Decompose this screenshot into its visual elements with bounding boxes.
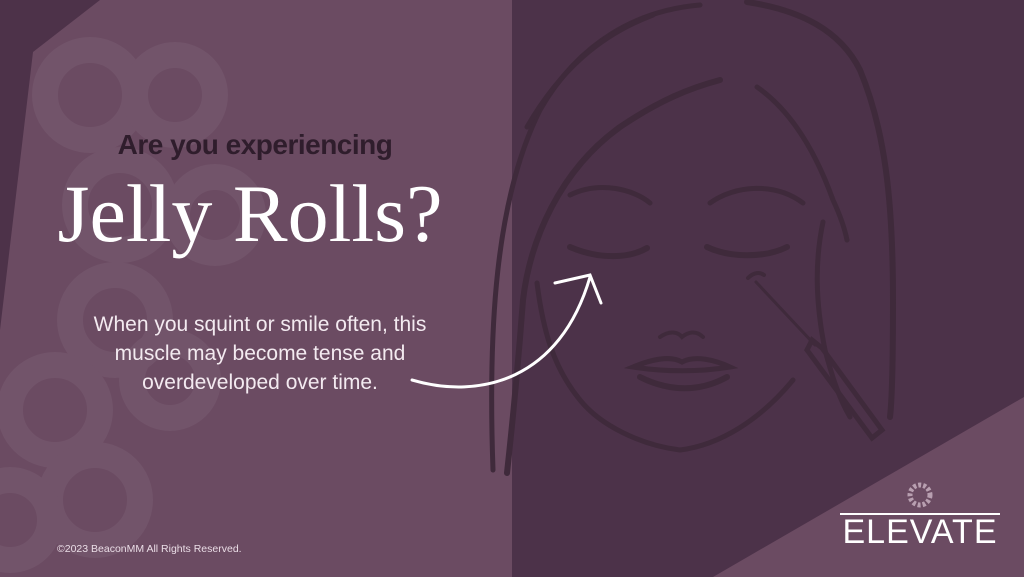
top-left dark corner <box>0 0 100 330</box>
icon: mandala <box>908 482 932 508</box>
nose <box>660 332 703 337</box>
lips <box>633 359 730 371</box>
decorative pattern <box>0 50 253 560</box>
text block: description: When you squint or smile often, this muscle may become tense and overdeveloped over time. <box>94 313 426 394</box>
right dark panel <box>512 0 1024 577</box>
heading: subtitle: Are you experiencing <box>118 129 392 160</box>
brows <box>570 187 650 203</box>
logo text: ELEVATE <box>842 513 998 551</box>
face illustration <box>492 2 893 473</box>
eyes <box>570 247 647 256</box>
copyright: ©2023 BeaconMM All Rights Reserved. <box>57 543 242 555</box>
tool <box>748 273 764 278</box>
logo: ELEVATE <box>840 482 1000 551</box>
arrow <box>412 275 601 387</box>
heading: title: Jelly Rolls? <box>58 168 442 259</box>
